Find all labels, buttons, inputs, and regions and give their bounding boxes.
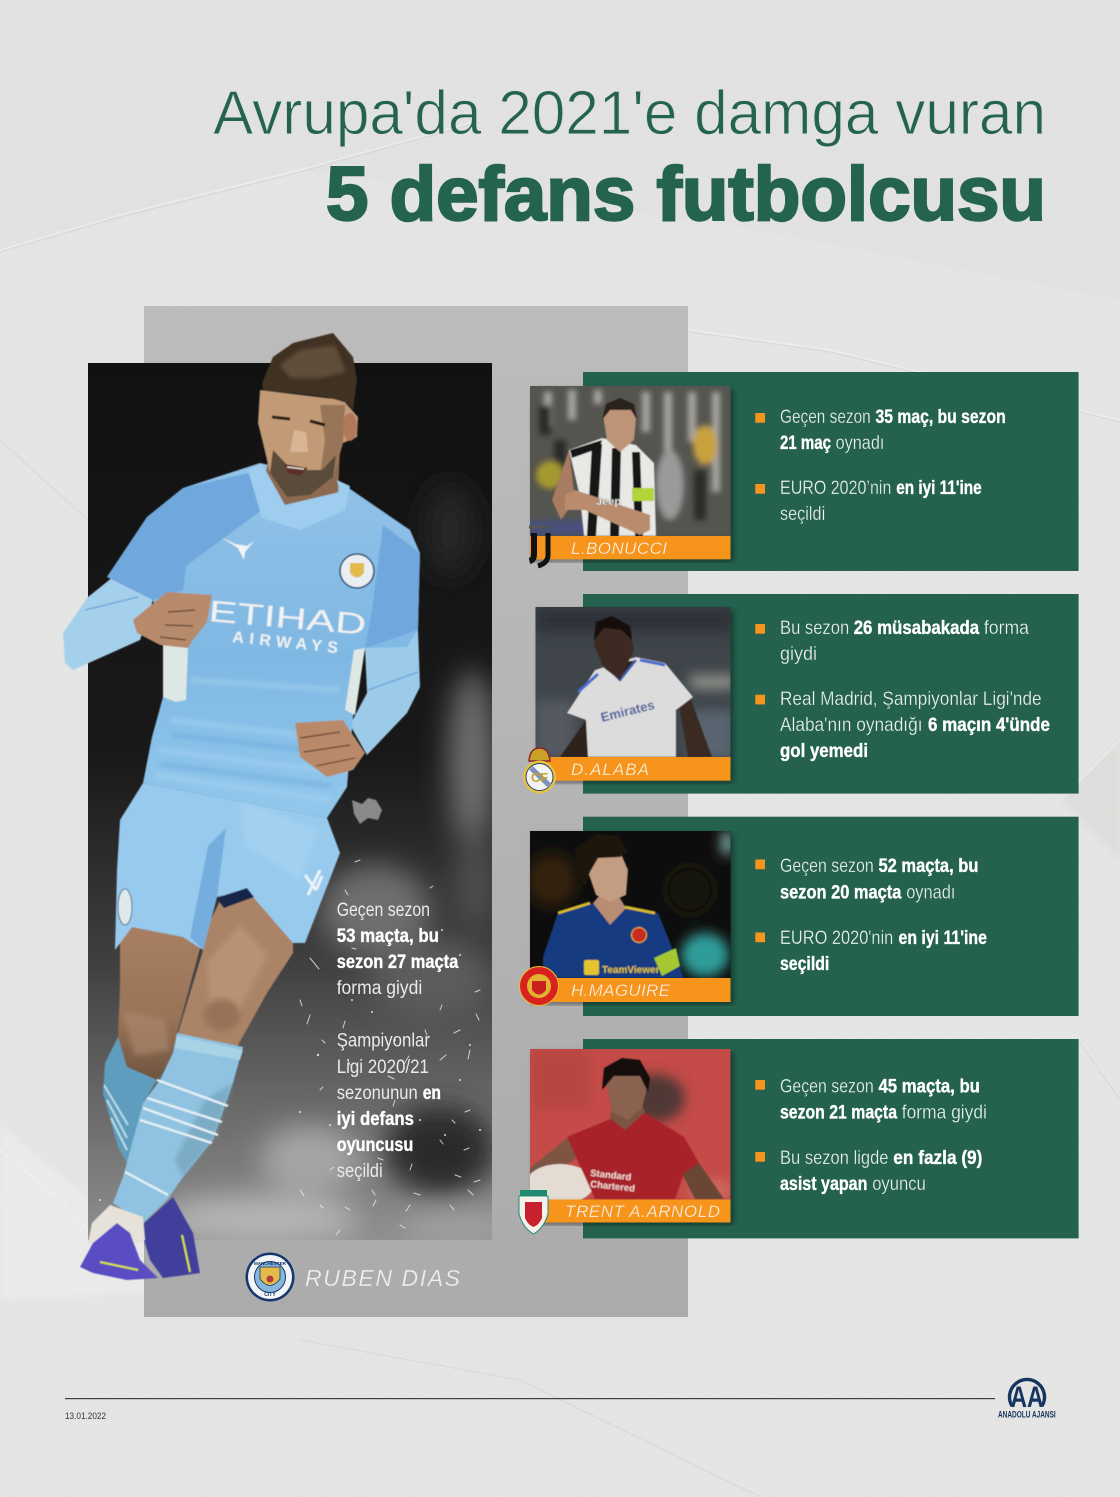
green card [583,817,1079,1016]
player name: Ruben Dias: RUBEN DIAS [305,1265,461,1291]
bullet list: 45 maçta, bu [878,1077,980,1098]
date: 13.01.2022 [65,1411,106,1421]
stat text: Ruben Dias: Ligi 2020/21 [337,1057,429,1078]
bullet list: en fazla (9) [893,1148,982,1169]
green card [583,372,1079,571]
bullet list: 35 maç, bu sezon [876,407,1006,428]
stat text: Ruben Dias: sezonunun [337,1083,418,1104]
photo: Alexander-Arnold: Standard [590,1168,632,1183]
stat text: Ruben Dias: Geçen sezon [337,900,430,921]
bullet list: Geçen sezon [780,856,874,877]
stat text: Ruben Dias: seçildi [337,1161,383,1182]
shorts number [305,870,322,895]
bullet list: en iyi 11'ine [896,478,982,499]
back leg [118,920,205,1080]
ear [343,413,357,441]
photo: Maguire: TeamViewer [602,965,660,976]
sponsor lettering: ETIHAD [207,595,368,642]
name bar [536,757,730,781]
photo: Bonucci [530,386,730,536]
bullet list: oynadı [836,433,884,454]
face [258,390,358,497]
panel: Maguire [520,817,1079,1016]
panel: Alexander-Arnold [519,1039,1079,1238]
hair [262,333,357,410]
icon: Real Madrid crest [523,748,556,794]
panel: Alaba: D.ALABA [571,760,649,779]
bullet list [755,407,1006,525]
bullet list: 21 maç [780,433,831,454]
photo: Alaba: Emirates [599,697,656,725]
panel: Alexander-Arnold: TRENT A.ARNOLD [565,1202,720,1221]
shirt [107,463,420,818]
panel: Bonucci [529,372,1079,571]
bullet list: Bu sezon [780,618,849,639]
bullet list: sezon 20 maçta [780,883,902,904]
photo: Alaba [535,607,735,760]
photo: Bonucci: Jeep [596,496,621,508]
name bar [530,1200,730,1222]
bullet list: oyuncu [872,1174,926,1195]
bullet list: 26 müsabakada [854,618,979,639]
city chest crest [340,554,374,588]
title line one: Avrupa'da 2021'e damga vuran [213,79,1046,148]
panel: Bonucci: L.BONUCCI [571,539,667,558]
boots [140,1197,200,1278]
bullet list: forma [984,618,1029,639]
name bar [530,536,730,559]
bullet list: gol yemedi [780,741,868,762]
icon: Liverpool crest [519,1190,548,1234]
left hand [133,592,212,648]
bullet list: oynadı [906,883,955,904]
bullet list: Geçen sezon [780,1077,874,1098]
photo: Alexander-Arnold [526,1049,730,1204]
bullet list: Real Madrid, Şampiyonlar Ligi'nde [780,689,1042,710]
bullet list: Geçen sezon [780,407,871,428]
icon: Manchester City crest [246,1252,294,1302]
green card [583,594,1079,794]
front leg [177,888,293,1047]
stat text: Ruben Dias: sezon 27 maçta [337,952,459,973]
panel: Ruben Dias photo background [88,363,520,1244]
right sleeve [350,630,420,755]
icon: Manchester City crest: CITY [264,1292,276,1298]
left sleeve [63,577,153,670]
bullet list: giydi [780,644,817,665]
bullet list: seçildi [780,504,825,525]
back sock [103,1037,157,1163]
photo: Maguire [528,831,732,978]
footer rule [65,1398,995,1399]
icon: Real Madrid crest: CF [531,770,548,785]
stat text: Ruben Dias: oyuncusu [337,1135,413,1156]
bullet list: sezon 21 maçta [780,1103,897,1124]
logo: Anadolu Ajansı [998,1379,1056,1420]
shorts crest [118,889,132,925]
bullet list: Bu sezon ligde [780,1148,888,1169]
figure: Ruben Dias: AIRWAYS [232,629,339,657]
stat text: Ruben Dias: iyi defans [337,1109,414,1130]
green card [583,1039,1079,1238]
icon: Manchester City crest: MANCHESTER [254,1261,287,1266]
bullet list: 6 maçın 4'ünde [928,715,1050,736]
logo: Anadolu Ajansı: ANADOLU AJANSI [998,1410,1056,1420]
stat text: Ruben Dias: en [423,1083,441,1104]
icon: Manchester United crest [520,966,558,1006]
panel: Alaba [523,594,1079,794]
bullet list: en iyi 11'ine [898,928,987,949]
bullet list: Alaba'nın oynadığı [780,715,922,736]
title line two: 5 defans futbolcusu [326,152,1046,237]
flying turf debris [300,860,480,1235]
panel: Maguire: H.MAGUIRE [571,981,671,1000]
shorts [115,783,340,950]
bullet list [755,618,1050,762]
title [213,79,1046,237]
bullet list: 52 maçta, bu [878,856,978,877]
stat text: Ruben Dias: Şampiyonlar [337,1031,431,1052]
neck [262,450,340,512]
collar [248,464,350,530]
bullet list [755,856,987,975]
front sock [113,1033,243,1223]
stat text: Ruben Dias [337,900,459,1182]
bullet list: seçildi [780,954,829,975]
photo: Alexander-Arnold: Chartered [590,1179,636,1195]
stat text: Ruben Dias: forma giydi [337,978,422,999]
logo: Anadolu Ajansı: AA [1010,1381,1044,1414]
bullet list: forma giydi [902,1103,987,1124]
puma logo [221,537,254,560]
bullet list: EURO 2020'nin [780,928,893,949]
bullet list [755,1077,987,1195]
stat text: Ruben Dias: 53 maçta, bu [337,926,439,947]
icon: Juventus crest [529,527,550,566]
right hand [295,720,365,777]
bullet list: asist yapan [780,1174,867,1195]
grey backing panel [144,306,688,1317]
bullet list: EURO 2020’nin [780,478,891,499]
name bar [530,978,730,1002]
figure: Ruben Dias [63,333,420,1280]
